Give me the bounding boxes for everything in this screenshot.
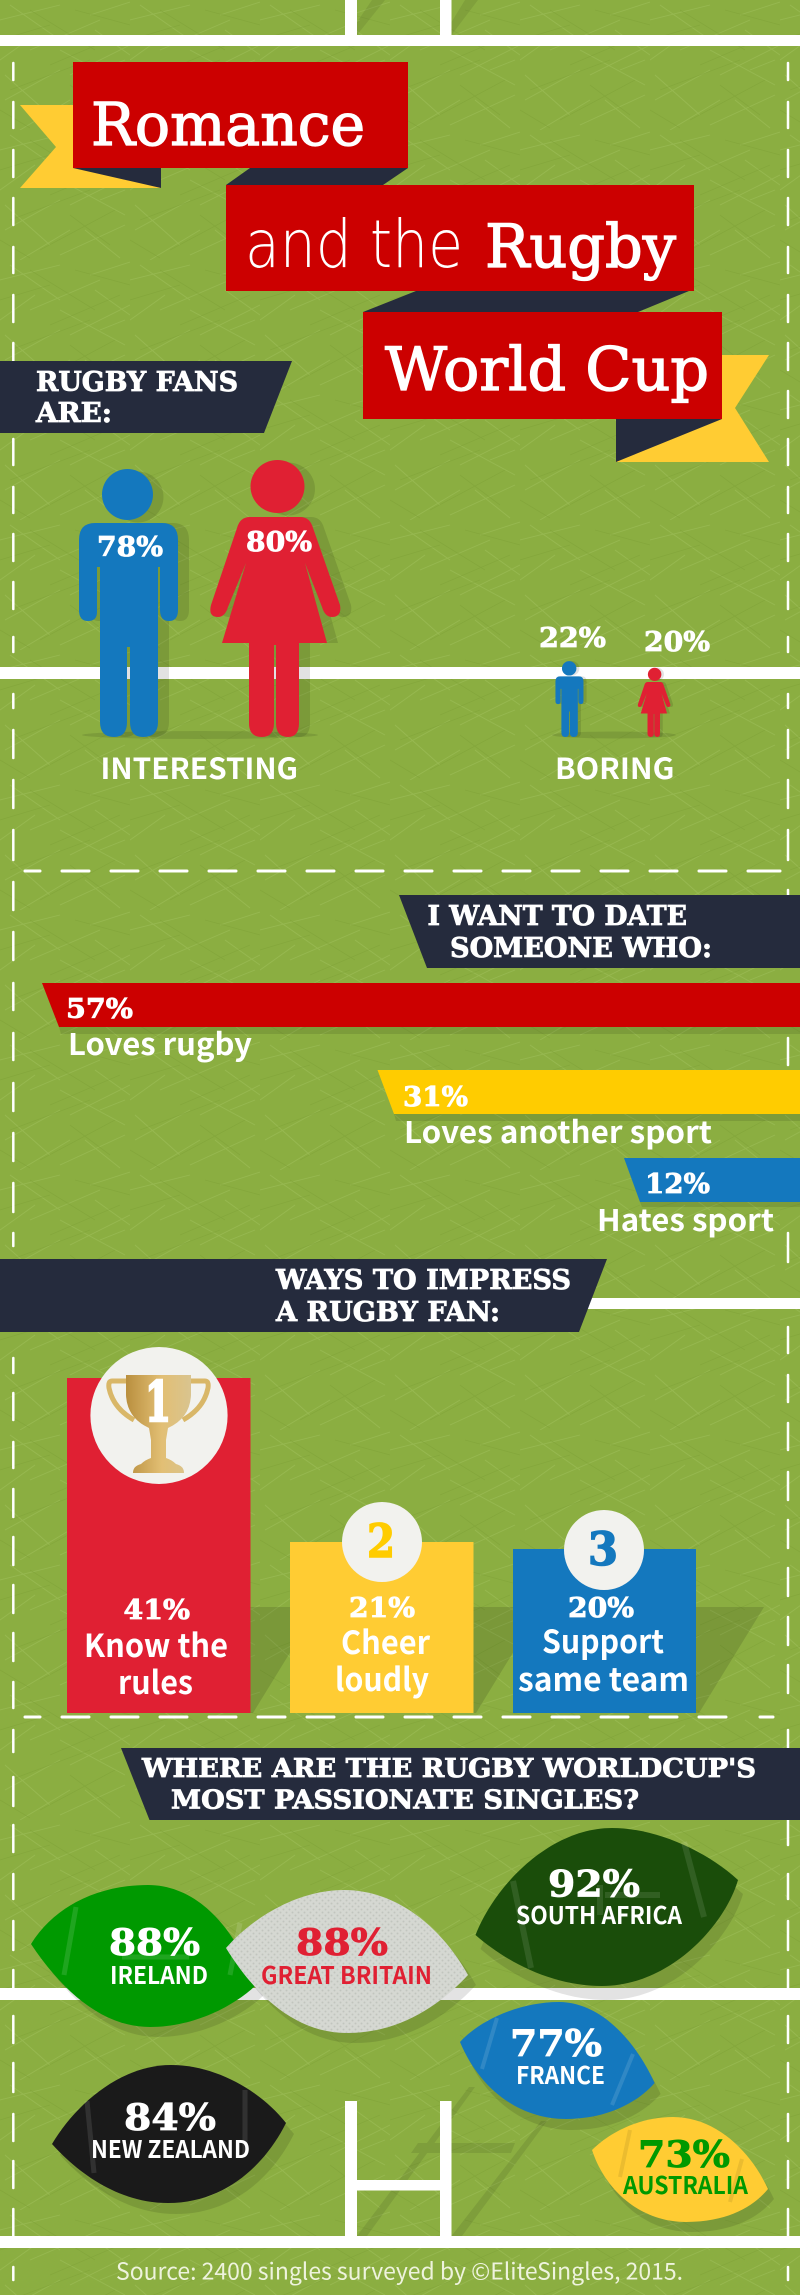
figure: man 78 percent: 78% xyxy=(97,532,163,563)
rugby ball: australia 73 percent xyxy=(592,2117,774,2232)
bar: hates sport 12 percent: Hates sport xyxy=(597,1196,774,1240)
bar: loves another sport 31 percent xyxy=(378,1070,800,1152)
rugby ball: france 77 percent xyxy=(460,2002,661,2130)
bar: loves rugby 57 percent xyxy=(42,983,800,1064)
title ribbon xyxy=(20,62,769,462)
halfway white line xyxy=(0,667,800,679)
figure: man 78 percent xyxy=(79,469,189,737)
title line one: Romance xyxy=(91,90,365,159)
goal posts at the bottom of the pitch xyxy=(345,2087,547,2236)
podium 2: cheer loudly: Cheer xyxy=(341,1618,430,1664)
rugby ball: great britain 88 percent xyxy=(226,1890,476,2043)
podium 2: cheer loudly: 2 xyxy=(367,1514,395,1568)
white line behind ways to impress banner xyxy=(0,1298,800,1309)
rugby ball: france 77 percent: 77% xyxy=(510,2023,602,2065)
title line two: Rugby xyxy=(485,212,676,282)
source note: Source: 2400 singles surveyed by ©EliteSingles, 2015. xyxy=(116,2252,683,2286)
heading: ways to impress a rugby fan xyxy=(0,1259,607,1332)
label: boring: BORING xyxy=(555,746,674,788)
ribbon fold between lines two and three xyxy=(363,291,689,312)
white line behind rugby balls xyxy=(0,1988,800,2000)
bar: loves rugby 57 percent: Loves rugby xyxy=(68,1020,252,1064)
bar: loves another sport 31 percent: Loves another sport xyxy=(404,1108,712,1152)
podium 3: support same team: 20% xyxy=(568,1593,634,1624)
figure: man 22 percent: 22% xyxy=(539,623,606,654)
heading: ways to impress a rugby fan: A RUGBY FAN: xyxy=(275,1297,500,1328)
heading: i want to date someone who xyxy=(399,895,800,968)
rugby ball: new zealand 84 percent: NEW ZEALAND xyxy=(91,2130,250,2165)
rugby ball: france 77 percent: FRANCE xyxy=(516,2056,605,2091)
chart: interesting figures xyxy=(79,460,351,788)
rugby ball: south africa 92 percent xyxy=(476,1828,743,2000)
chart: ways to impress podium xyxy=(67,1347,764,1713)
bar: hates sport 12 percent xyxy=(597,1158,800,1240)
ground shadow xyxy=(552,732,676,738)
podium 2: cheer loudly: loudly xyxy=(335,1655,429,1701)
podium 3: support same team: same team xyxy=(518,1655,689,1701)
ribbon left fold xyxy=(73,168,161,188)
rugby ball: new zealand 84 percent: 84% xyxy=(124,2097,216,2139)
heading: most passionate singles: WHERE ARE THE RUGBY WORLDCUP'S xyxy=(141,1754,756,1784)
ground shadow xyxy=(82,731,318,739)
bar: loves rugby 57 percent: 57% xyxy=(66,994,133,1025)
title line three xyxy=(363,312,722,419)
heading: rugby fans are: RUGBY FANS xyxy=(36,367,238,398)
figure: woman 80 percent xyxy=(210,460,351,737)
figure: woman 20 percent: 20% xyxy=(644,627,710,658)
try line at the bottom xyxy=(0,2236,800,2248)
icon: trophy: 1 xyxy=(145,1369,171,1434)
podium 3: support same team: 3 xyxy=(588,1522,618,1576)
title line three: World Cup xyxy=(385,335,709,405)
bar: hates sport 12 percent: 12% xyxy=(645,1169,710,1200)
rugby ball: ireland 88 percent xyxy=(31,1885,263,2037)
podium 1: know the rules: Know the xyxy=(84,1621,228,1667)
heading: rugby fans are: ARE: xyxy=(35,398,112,429)
ribbon left tail xyxy=(20,105,161,188)
ribbon right tail xyxy=(616,355,769,462)
title line two xyxy=(226,185,694,291)
ribbon right fold xyxy=(616,419,722,462)
figure: woman 80 percent: 80% xyxy=(246,527,312,558)
podium 2: cheer loudly xyxy=(290,1502,474,1713)
heading: most passionate singles xyxy=(121,1748,800,1820)
podium 1: know the rules xyxy=(67,1347,250,1713)
heading: ways to impress a rugby fan: WAYS TO IMPRESS xyxy=(275,1265,571,1296)
title line two: and the xyxy=(245,206,463,283)
heading: i want to date someone who: I WANT TO DATE xyxy=(428,901,687,932)
podium 3: support same team xyxy=(513,1510,696,1713)
rugby ball: ireland 88 percent: IRELAND xyxy=(110,1956,208,1991)
title line one xyxy=(73,62,408,168)
goal posts at the top of the pitch xyxy=(0,0,800,46)
rugby ball: australia 73 percent: AUSTRALIA xyxy=(622,2166,749,2201)
podium shadows xyxy=(250,1607,764,1713)
rugby ball: south africa 92 percent: SOUTH AFRICA xyxy=(516,1896,683,1931)
rugby ball: great britain 88 percent: 88% xyxy=(296,1922,388,1964)
rugby ball: australia 73 percent: 73% xyxy=(638,2134,730,2176)
icon: trophy xyxy=(109,1369,208,1473)
heading: rugby fans are xyxy=(0,361,292,433)
rugby ball: ireland 88 percent: 88% xyxy=(109,1922,200,1964)
podium 1: know the rules: 41% xyxy=(124,1595,190,1626)
podium 2: cheer loudly: 21% xyxy=(349,1593,415,1624)
rugby ball: great britain 88 percent: GREAT BRITAIN xyxy=(261,1956,432,1991)
figure: woman 20 percent xyxy=(638,627,710,737)
chart: boring figures xyxy=(539,623,710,788)
ribbon fold between lines one and two xyxy=(226,168,408,185)
rugby ball: new zealand 84 percent xyxy=(52,2065,294,2214)
heading: i want to date someone who: SOMEONE WHO: xyxy=(450,933,712,964)
podium 3: support same team: Support xyxy=(542,1617,664,1663)
figure: man 22 percent xyxy=(539,623,606,737)
rugby ball: south africa 92 percent: 92% xyxy=(548,1864,640,1906)
label: interesting: INTERESTING xyxy=(100,746,298,788)
bar: loves another sport 31 percent: 31% xyxy=(403,1082,468,1113)
podium 1: know the rules: rules xyxy=(118,1658,193,1704)
heading: most passionate singles: MOST PASSIONATE SINGLES? xyxy=(171,1786,639,1816)
